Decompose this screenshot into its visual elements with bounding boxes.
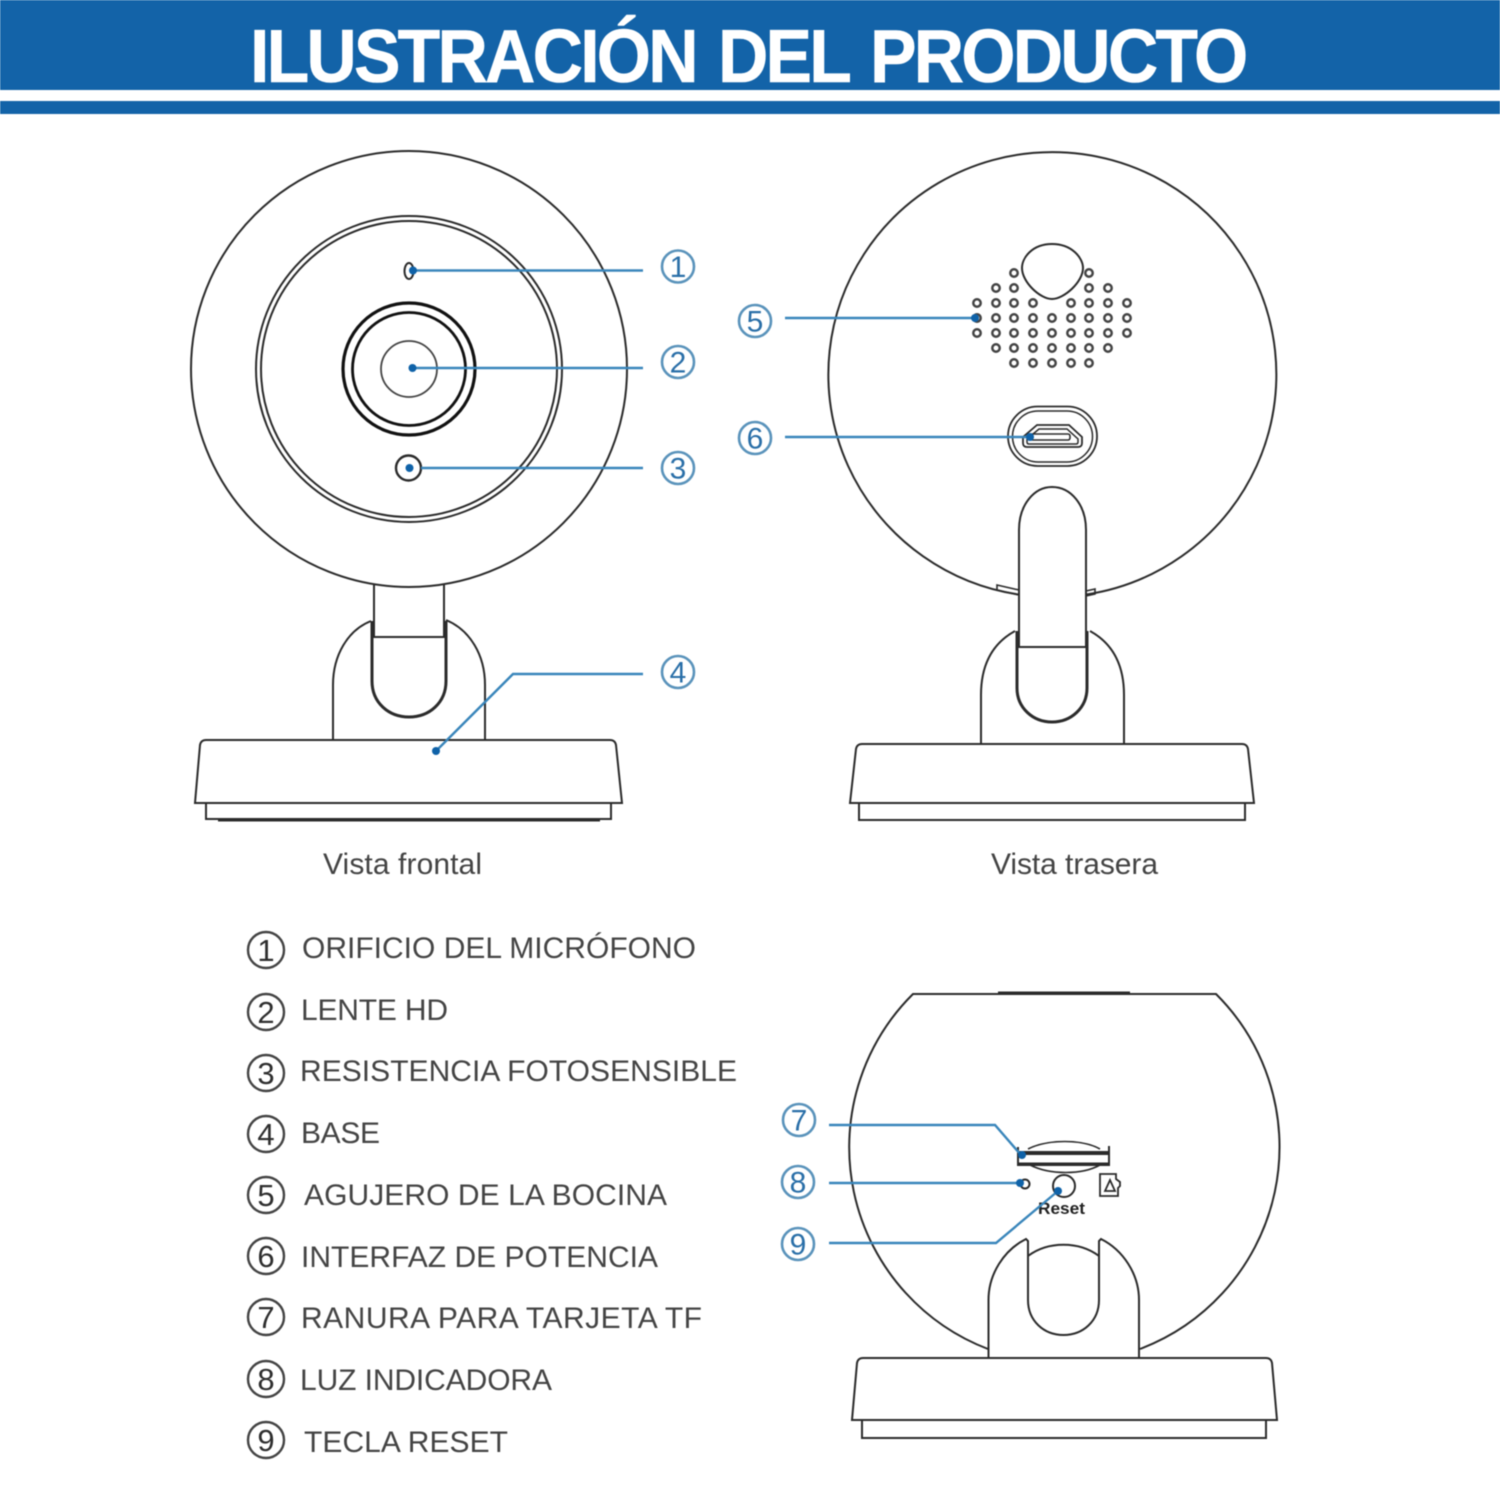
legend item 2: LENTE HD: [301, 994, 448, 1027]
legend item 6: INTERFAZ DE POTENCIA: [301, 1241, 658, 1274]
legend item 3: RESISTENCIA FOTOSENSIBLE: [300, 1055, 737, 1088]
front view camera: [191, 151, 627, 820]
legend item 9: [248, 1422, 508, 1459]
callout 2: [408, 346, 694, 380]
callout 5: 5: [747, 306, 763, 338]
callout 1: 1: [670, 251, 686, 284]
legend item 4: BASE: [301, 1117, 380, 1150]
callout 6: [739, 422, 1034, 456]
bottom view camera: [849, 993, 1280, 1438]
caption: back view: Vista trasera: [991, 848, 1158, 881]
sd card icon: [1100, 1174, 1120, 1196]
callout 1: [409, 250, 694, 284]
reset button: Reset: [1038, 1199, 1085, 1218]
legend item 7: 7: [257, 1300, 275, 1335]
callout 3: [406, 452, 694, 486]
callout 3: 3: [670, 452, 686, 486]
reset button: [1038, 1175, 1085, 1218]
callout 9: [782, 1187, 1062, 1262]
callout 4: 4: [670, 656, 686, 690]
callout 6: 6: [747, 422, 763, 456]
legend item 9: TECLA RESET: [304, 1426, 508, 1459]
callout 7: 7: [791, 1104, 807, 1138]
callout 8: 8: [790, 1166, 806, 1200]
legend item 8: 8: [257, 1362, 275, 1397]
legend item 9: 9: [257, 1423, 275, 1458]
callout 2: 2: [670, 346, 686, 380]
callout 4: [432, 656, 694, 755]
legend item 2: [248, 994, 448, 1030]
indicator light: [1020, 1180, 1030, 1188]
tf card slot: [1018, 1142, 1109, 1172]
title banner: ILUSTRACIÓN DEL PRODUCTO: [250, 15, 1246, 99]
callout 7: [783, 1104, 1026, 1159]
legend list: [248, 932, 737, 1459]
legend item 1: ORIFICIO DEL MICRÓFONO: [302, 932, 696, 965]
speaker hole grille: [973, 244, 1131, 367]
callout 5: [739, 305, 979, 338]
legend item 1: 1: [257, 933, 275, 968]
callout 8: [782, 1166, 1024, 1200]
legend item 4: [248, 1116, 380, 1152]
legend item 8: LUZ INDICADORA: [300, 1364, 552, 1397]
legend item 5: 5: [257, 1178, 275, 1213]
title banner: [0, 0, 1500, 114]
legend item 4: 4: [257, 1117, 275, 1152]
legend item 3: 3: [257, 1056, 275, 1091]
back view camera: [828, 152, 1276, 820]
caption: front view: Vista frontal: [323, 848, 482, 881]
legend item 5: AGUJERO DE LA BOCINA: [304, 1179, 667, 1212]
callout 9: 9: [790, 1228, 806, 1262]
legend item 2: 2: [257, 995, 275, 1030]
power port: [1008, 406, 1097, 466]
legend item 7: RANURA PARA TARJETA TF: [301, 1302, 702, 1335]
legend item 6: 6: [257, 1239, 275, 1274]
